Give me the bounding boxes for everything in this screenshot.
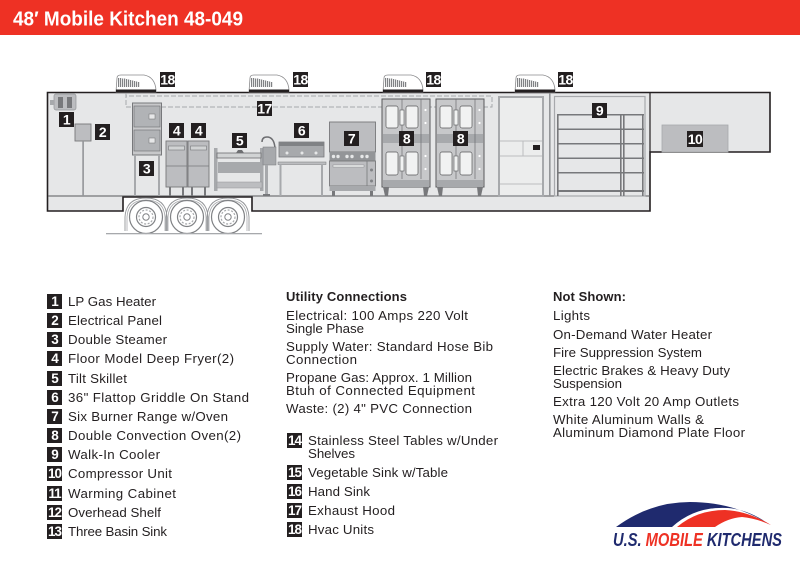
logo: U.S. Mobile Kitchens bbox=[613, 502, 782, 550]
diagram number labels: 18 bbox=[426, 72, 441, 88]
wheels and axles bbox=[106, 198, 262, 234]
not shown text block: Lights bbox=[553, 308, 590, 323]
equipment legend list 1-13: 10 bbox=[48, 466, 61, 481]
diagram number labels: 4 bbox=[173, 122, 181, 138]
equipment legend list 14-18 bbox=[287, 433, 499, 537]
hvac unit 4 bbox=[515, 75, 555, 92]
diagram number labels: 7 bbox=[348, 130, 356, 146]
utility connections text block: Electrical: 100 Amps 220 Volt bbox=[286, 308, 468, 323]
equipment legend list 1-13: 12 bbox=[48, 505, 61, 520]
not shown text block: Aluminum Diamond Plate Floor bbox=[553, 425, 746, 440]
equipment legend list 14-18: 18 bbox=[288, 522, 302, 537]
equipment legend list 1-13: Warming Cabinet bbox=[68, 486, 176, 501]
equipment legend list 14-18: Hvac Units bbox=[308, 522, 374, 537]
header banner bbox=[0, 0, 800, 35]
equipment legend list 1-13: Electrical Panel bbox=[68, 313, 162, 328]
diagram number labels: 1 bbox=[63, 112, 71, 128]
double steamer bbox=[132, 103, 162, 196]
utility connections text block: Propane Gas: Approx. 1 Million bbox=[286, 370, 472, 385]
not shown text block: Extra 120 Volt 20 Amp Outlets bbox=[553, 394, 739, 409]
diagram number labels: 3 bbox=[143, 160, 151, 176]
deep fryer left bbox=[166, 141, 187, 196]
diagram number labels: 6 bbox=[298, 122, 306, 138]
utility connections text block: Btuh of Connected Equipment bbox=[286, 383, 475, 398]
not shown text block: Suspension bbox=[553, 376, 622, 391]
equipment legend list 1-13: 5 bbox=[51, 371, 59, 386]
equipment legend list 14-18: 15 bbox=[288, 465, 302, 480]
diagram number labels: 4 bbox=[195, 122, 203, 138]
logo: U.S. Mobile Kitchens: U.S. MOBILE KITCHENS bbox=[613, 530, 782, 550]
equipment legend list 1-13: LP Gas Heater bbox=[68, 294, 157, 309]
diagram number labels: 17 bbox=[257, 100, 272, 116]
equipment legend list 14-18: 16 bbox=[288, 484, 302, 499]
equipment legend list 1-13: Three Basin Sink bbox=[68, 524, 167, 539]
title: 48′ Mobile Kitchen 48-049 bbox=[13, 8, 243, 30]
equipment legend list 1-13: 2 bbox=[51, 313, 58, 328]
equipment legend list 1-13: Walk-In Cooler bbox=[68, 447, 161, 462]
trailer body bbox=[48, 92, 770, 211]
equipment legend list 1-13: 8 bbox=[51, 428, 59, 443]
utility connections text block bbox=[286, 289, 493, 416]
equipment legend list 1-13: 6 bbox=[51, 390, 59, 405]
utility connections text block: Single Phase bbox=[286, 321, 364, 336]
utility connections text block: Supply Water: Standard Hose Bib bbox=[286, 339, 493, 354]
not shown text block: Fire Suppression System bbox=[553, 345, 702, 360]
equipment legend list 14-18: Hand Sink bbox=[308, 484, 370, 499]
equipment legend list 14-18: Exhaust Hood bbox=[308, 503, 395, 518]
utility connections text block: Utility Connections bbox=[286, 289, 407, 304]
diagram number labels: 8 bbox=[457, 130, 465, 146]
LP gas heater icon bbox=[50, 94, 76, 110]
equipment legend list 1-13: Six Burner Range w/Oven bbox=[68, 409, 228, 424]
diagram number labels: 18 bbox=[558, 72, 573, 88]
equipment legend list 1-13: Compressor Unit bbox=[68, 466, 172, 481]
diagram number labels: 9 bbox=[596, 102, 604, 118]
electrical panel icon bbox=[75, 124, 91, 196]
double convection oven right bbox=[436, 99, 484, 196]
equipment legend list 14-18: 14 bbox=[288, 433, 302, 448]
deep fryer right bbox=[188, 141, 209, 196]
equipment legend list 1-13: 13 bbox=[48, 524, 62, 539]
diagram number labels: 2 bbox=[99, 124, 107, 140]
equipment legend list 1-13: Floor Model Deep Fryer(2) bbox=[68, 351, 234, 366]
hvac unit 3 bbox=[383, 75, 423, 92]
not shown text block: White Aluminum Walls & bbox=[553, 412, 704, 427]
hvac unit 2 bbox=[249, 75, 289, 92]
utility connections text block: Waste: (2) 4" PVC Connection bbox=[286, 401, 472, 416]
equipment legend list 1-13: Double Convection Oven(2) bbox=[68, 428, 241, 443]
six burner range with oven bbox=[330, 122, 376, 196]
equipment legend list 14-18: Shelves bbox=[308, 446, 355, 461]
equipment legend list 1-13: 36" Flattop Griddle On Stand bbox=[68, 390, 249, 405]
trailer floor plan diagram bbox=[48, 72, 770, 234]
equipment legend list 1-13: 7 bbox=[51, 409, 58, 424]
equipment legend list 14-18: Stainless Steel Tables w/Under bbox=[308, 433, 499, 448]
equipment legend list 1-13: 3 bbox=[51, 332, 59, 347]
double convection oven left bbox=[382, 99, 430, 196]
walk-in cooler door bbox=[499, 93, 551, 196]
not shown text block: Electric Brakes & Heavy Duty bbox=[553, 363, 730, 378]
equipment legend list 14-18: Vegetable Sink w/Table bbox=[308, 465, 448, 480]
equipment legend list 1-13 bbox=[47, 294, 249, 539]
equipment legend list 1-13: 4 bbox=[51, 351, 59, 366]
equipment legend list 1-13: 11 bbox=[48, 486, 62, 501]
not shown text block bbox=[553, 289, 746, 440]
equipment legend list 1-13: 1 bbox=[51, 294, 59, 309]
tilt skillet bbox=[214, 137, 276, 196]
equipment legend list 1-13: Double Steamer bbox=[68, 332, 168, 347]
equipment legend list 1-13: Tilt Skillet bbox=[68, 371, 127, 386]
utility connections text block: Connection bbox=[286, 352, 357, 367]
equipment legend list 1-13: Overhead Shelf bbox=[68, 505, 161, 520]
diagram number labels bbox=[59, 72, 703, 176]
equipment legend list 1-13: 9 bbox=[51, 447, 58, 462]
diagram number labels: 5 bbox=[236, 132, 244, 148]
flattop griddle on stand bbox=[278, 142, 326, 196]
diagram number labels: 18 bbox=[293, 72, 308, 88]
equipment legend list 14-18: 17 bbox=[288, 503, 301, 518]
diagram number labels: 8 bbox=[403, 130, 411, 146]
exhaust hood outline bbox=[126, 93, 492, 107]
diagram number labels: 18 bbox=[160, 72, 175, 88]
not shown text block: On-Demand Water Heater bbox=[553, 327, 713, 342]
walk-in cooler shelving bbox=[554, 96, 645, 196]
hvac unit 1 bbox=[116, 75, 156, 92]
compressor unit bbox=[662, 125, 728, 152]
diagram number labels: 10 bbox=[688, 131, 703, 147]
not shown text block: Not Shown: bbox=[553, 289, 626, 304]
